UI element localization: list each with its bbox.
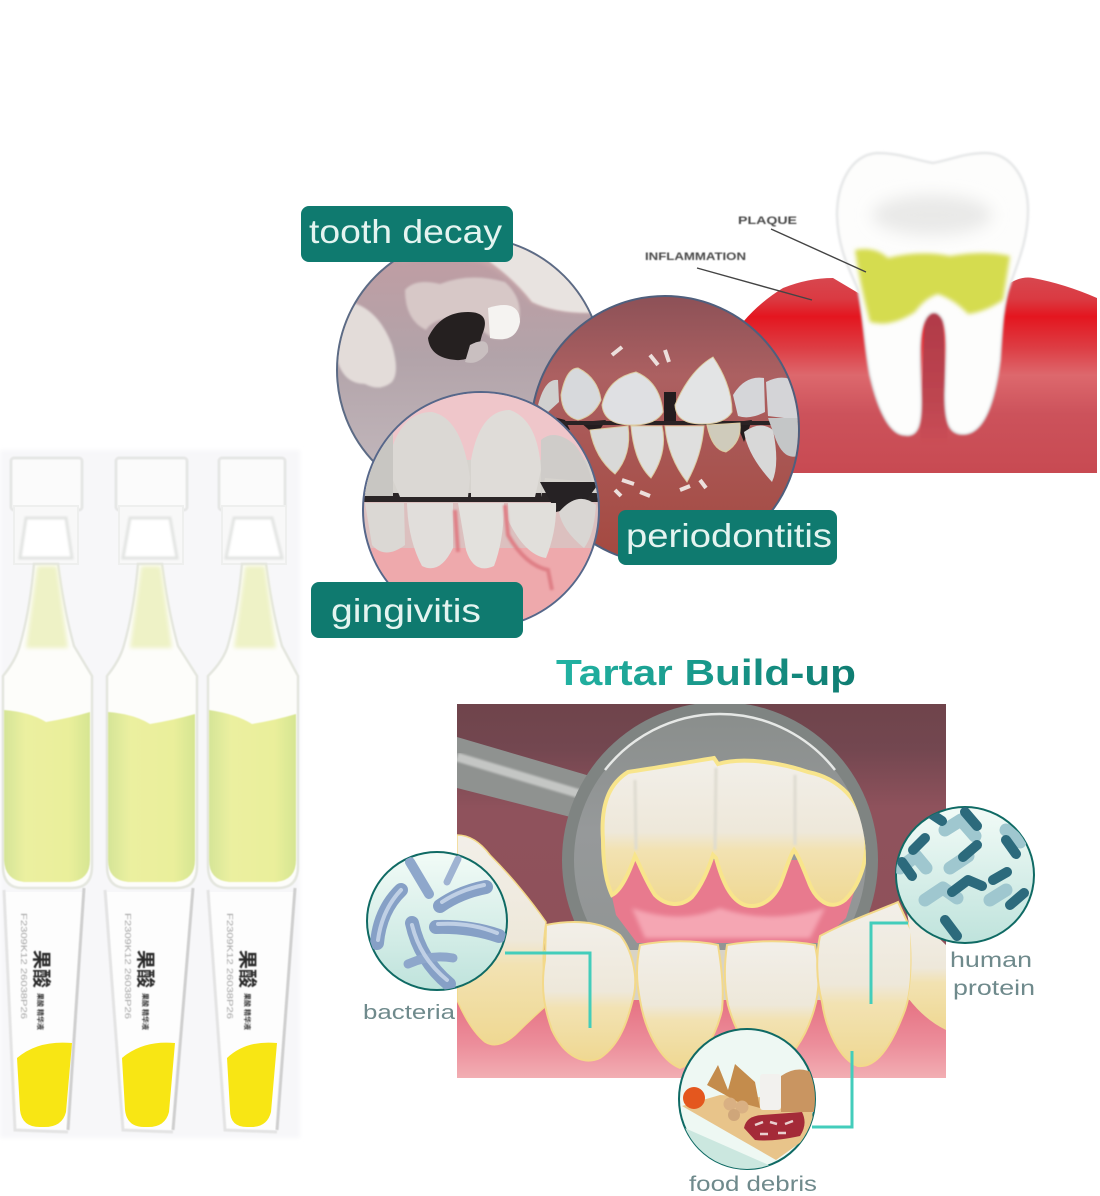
plaque label: PLAQUE: [738, 215, 797, 227]
photo circle: gingivitis: [362, 390, 602, 628]
callout circle: food debris: [678, 1029, 815, 1170]
callout circle: human protein: [896, 807, 1034, 943]
tooth: [837, 153, 1028, 435]
label: periodontitis: periodontitis: [626, 517, 832, 554]
label: tooth decay: [301, 206, 513, 262]
label: food debris: food debris: [689, 1173, 817, 1196]
vial 3: [208, 458, 298, 1132]
lower gum: [457, 995, 946, 1078]
vial 1: 果酸 精华液: [36, 993, 45, 1030]
illustration: tartar on teeth with dental mirror: [457, 702, 946, 1078]
connector: bacteria: [505, 953, 590, 1028]
vial 1: F2309K12 26038P26: [19, 913, 28, 1020]
connector: food debris: [812, 1051, 852, 1127]
gum: [743, 278, 1097, 473]
plaque label: [738, 215, 866, 272]
photo circle: tooth decay: [336, 243, 593, 462]
vial 2: 果酸 精华液: [141, 993, 150, 1030]
lower teeth: [457, 835, 547, 1045]
inflammation label: [645, 251, 812, 300]
callout circle: bacteria: [367, 852, 507, 990]
vial 3: 果酸: [236, 950, 258, 988]
photo circle: periodontitis: [530, 296, 800, 564]
label: periodontitis: [618, 510, 837, 565]
mirror: [562, 704, 878, 922]
vial 3: F2309K12 26038P26: [225, 913, 234, 1020]
plaque band: [855, 249, 1010, 324]
connector: human protein: [871, 923, 908, 1004]
mirror handle: [457, 737, 590, 822]
vial 2: 果酸: [134, 950, 156, 988]
label: bacteria: bacteria: [363, 1002, 456, 1024]
heading: Tartar Build-up: Tartar Build-up: [556, 652, 856, 693]
label: tooth decay: tooth decay: [309, 213, 503, 250]
vial 1: [3, 458, 92, 1132]
vial 3: 果酸 精华液: [243, 993, 252, 1030]
label: gingivitis: [311, 582, 523, 638]
label: human protein: human: [950, 949, 1032, 972]
panel: product vials: [0, 450, 300, 1138]
vial 1: 果酸: [30, 950, 52, 988]
inflammation label: INFLAMMATION: [645, 251, 746, 263]
vial 2: [105, 458, 197, 1132]
vial 2: F2309K12 26038P26: [123, 913, 132, 1020]
label: gingivitis: gingivitis: [331, 592, 481, 629]
illustration: tooth with plaque and inflamed gum: [645, 153, 1097, 473]
label: human protein line 2: protein: [953, 977, 1035, 1000]
